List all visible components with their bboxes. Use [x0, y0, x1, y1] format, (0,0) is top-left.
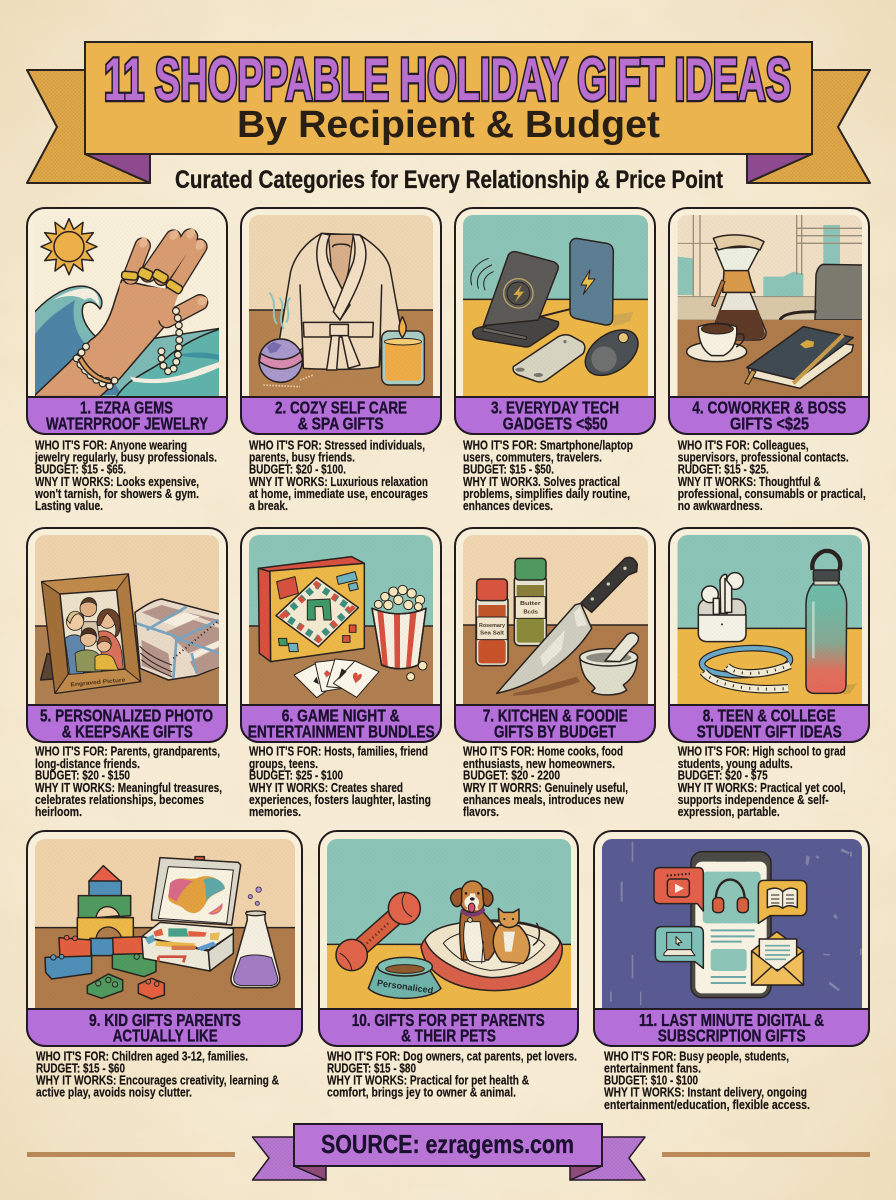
heading band: SUBSCRIPTION GIFTS — [658, 1026, 806, 1046]
heading band — [455, 397, 655, 434]
illustration: blocks, art kit and science flask — [33, 837, 297, 1011]
heading band: 2. COZY SELF CARE — [275, 397, 407, 417]
banner face — [85, 42, 812, 154]
text block: WHO IT'S FOR: Dog owners, cat parents, pet lovers. — [327, 1049, 577, 1063]
text block — [249, 438, 428, 513]
heading band: 3. EVERYDAY TECH — [491, 397, 619, 417]
text block: WHY IT WORKS: Creates shared — [249, 781, 403, 795]
heading band: WATERPROOF JEWELRY — [46, 413, 208, 433]
text block: WHO IT'S FOR: Hosts, families, friend — [249, 745, 428, 759]
text block: entertainment fans. — [604, 1061, 701, 1075]
heading band — [27, 397, 227, 434]
text block: WHY IT WORKS: Instant delivery, ongoing — [604, 1086, 807, 1100]
source ribbon — [252, 1124, 645, 1180]
text block: WHO IT'S FOR: Smartphone/laptop — [463, 438, 633, 452]
text block: active play, avoids noisy clutter. — [36, 1086, 192, 1100]
text block: no awkwardness. — [678, 499, 763, 513]
text block: WHY IT WORKS: Meaningful treasures, — [35, 781, 222, 795]
text block: users, commuters, travelers. — [463, 450, 602, 464]
heading band: 9. KID GIFTS PARENTS — [89, 1010, 241, 1030]
text block — [463, 745, 628, 819]
text block: parents, busy friends. — [249, 450, 355, 464]
text block: expression, partable. — [678, 805, 780, 819]
text block — [678, 438, 866, 513]
text block: WHO IT'S FOR: Home cooks, food — [463, 745, 623, 759]
heading band: 7. KITCHEN & FOODIE — [483, 706, 628, 726]
text block — [327, 1049, 577, 1100]
heading band — [669, 705, 869, 742]
text block — [678, 745, 846, 819]
text block: groups, teens. — [249, 757, 318, 771]
text block: supports independence & self- — [678, 793, 829, 807]
heading band: 11. LAST MINUTE DIGITAL & — [639, 1010, 824, 1030]
illustration: spice jars, chef knife and mortar: Butter — [520, 601, 542, 607]
panel: 3 Everyday tech gadgets — [455, 208, 655, 513]
text block: WNY IT WORKS: Luxurious relaxation — [249, 475, 428, 489]
heading band: GIFTS <$25 — [730, 413, 809, 433]
text block — [249, 745, 431, 819]
panel: 2 Cozy self care and spa gifts — [241, 208, 441, 513]
text block: WHO IT'S FOR: Children aged 3-12, families. — [36, 1049, 248, 1063]
heading band: GADGETS <$50 — [503, 413, 608, 433]
source text: SOURCE: ezragems.com — [321, 1129, 574, 1159]
text block: flavors. — [463, 805, 499, 819]
panel: 5 Personalized photo and keepsake gifts — [27, 528, 227, 819]
text block: BUDGET: $15 - $50. — [463, 462, 554, 476]
heading band: & SPA GIFTS — [298, 413, 384, 433]
title banner — [27, 42, 870, 183]
heading band — [241, 397, 441, 434]
text block: WNY IT WORKS: Looks expensive, — [35, 475, 199, 489]
text block — [463, 438, 633, 513]
illustration: chew toy, personalized bowl, dog and cat on a bed: Personaliced — [376, 978, 434, 996]
text block: experiences, fosters laughter, lasting — [249, 793, 431, 807]
footer rule left — [27, 1152, 235, 1157]
illustration: robe, bath bomb and candle — [247, 213, 437, 398]
text block: long-distance friends. — [35, 757, 140, 771]
text block: memories. — [249, 805, 301, 819]
panel: 7 Kitchen and foodie gifts by budget — [455, 528, 655, 819]
panel: 1 Ezra Gems waterproof jewelry — [27, 208, 227, 513]
heading band — [319, 1009, 578, 1046]
heading band: STUDENT GIFT IDEAS — [697, 722, 842, 742]
heading band: & KEEPSAKE GIFTS — [62, 722, 193, 742]
illustration: family photo frame and plaid blanket: Engraved Picture — [70, 678, 126, 688]
panel: 6 Game night and entertainment bundles — [241, 528, 441, 819]
heading band: 6. GAME NIGHT & — [282, 706, 400, 726]
illustration: spice jars, chef knife and mortar: Rosemary — [479, 623, 505, 629]
text block: comfort, brings jey to owner & animal. — [327, 1086, 516, 1100]
text block: enhances meals, introduces new — [463, 793, 624, 807]
text block: entertainment/education, flexible access. — [604, 1098, 810, 1112]
heading band: 10. GIFTS FOR PET PARENTS — [352, 1010, 545, 1030]
heading band: ENTERTAINMENT BUNDLES — [248, 722, 435, 742]
text block: BUDGET: $10 - $100 — [604, 1074, 698, 1088]
heading band: 8. TEEN & COLLEGE — [703, 706, 836, 726]
illustration: hand with rings, sun and wave — [33, 212, 223, 398]
illustration: board game, playing cards and popcorn — [247, 533, 437, 706]
text block: supervisors, professional contacts. — [678, 450, 849, 464]
text block: WHY IT WORKS: Encourages creativity, learning & — [36, 1074, 279, 1088]
text block: RUDGET: $15 - $80 — [327, 1061, 416, 1075]
heading band: 4. COWORKER & BOSS — [692, 397, 846, 417]
right ribbon tail — [747, 70, 870, 183]
text block — [604, 1049, 810, 1112]
text block — [36, 1049, 279, 1100]
heading band: 1. EZRA GEMS — [80, 397, 173, 417]
text block: WHY IT WORKS: Practical yet cool, — [678, 781, 846, 795]
panel: 10 Gifts for pet parents and their pets — [319, 831, 578, 1100]
panel: 11 Last minute digital and subscription gifts — [594, 831, 869, 1112]
heading band — [594, 1009, 869, 1046]
text block: BUDGET: $20 - $75 — [678, 769, 768, 783]
text block: WHO IT'S FOR: High school to grad — [678, 745, 846, 759]
heading band: & THEIR PETS — [401, 1026, 496, 1046]
illustration: pour-over coffee, cup and notebook — [677, 213, 865, 400]
text block: jewelry regularly, busy professionals. — [34, 450, 217, 464]
illustration: chew toy, personalized bowl, dog and cat on a bed — [325, 837, 573, 1011]
illustration: earbuds, measuring tape and water bottle — [677, 533, 865, 707]
text block — [34, 438, 217, 513]
text block: RUDGET: $15 - $60 — [36, 1061, 125, 1075]
text block: Lasting value. — [35, 499, 103, 513]
heading band: ACTUALLY LIKE — [113, 1026, 218, 1046]
text block: a break. — [249, 499, 288, 513]
text block: enthusiasts, new homeowners. — [463, 757, 615, 771]
text block: WHO IT'S FOR: Busy people, students, — [604, 1049, 789, 1063]
ribbon face — [294, 1124, 602, 1166]
panel: 4 Coworker and boss gifts — [669, 208, 869, 513]
text block: WNY IT WORKS: Thoughtful & — [678, 475, 821, 489]
text block: BUDGET: $15 - $65. — [35, 462, 126, 476]
text block: WHO IT'S FOR: Stressed individuals, — [249, 438, 425, 452]
illustration: wireless charger, power banks and tracker — [462, 213, 650, 399]
heading band — [27, 705, 227, 742]
text block: at home, immediate use, encourages — [249, 487, 428, 501]
text block: won't tarnish, for showers & gym. — [34, 487, 199, 501]
text block: WRY IT WORRS: Genuinely useful, — [463, 781, 628, 795]
text block: BUDGET: $20 - 2200 — [463, 769, 560, 783]
heading band: GIFTS BY BUDGET — [494, 722, 616, 742]
illustration: family photo frame and plaid blanket — [33, 533, 222, 706]
text block: problems, simplifies daily routine, — [463, 487, 630, 501]
heading band — [241, 705, 441, 742]
illustration: spice jars, chef knife and mortar: Sea Salt — [480, 631, 504, 637]
subtitle line in banner: By Recipient & Budget — [237, 104, 660, 146]
text block: WHY IT WORKS: Practical for pet health & — [327, 1074, 529, 1088]
tagline: Curated Categories for Every Relationship & Price Point — [175, 166, 724, 194]
heading band — [455, 705, 655, 742]
heading band — [669, 397, 869, 434]
text block: WHO IT'S FOR: Parents, grandparents, — [35, 745, 220, 759]
panel: 8 Teen and college student gift ideas — [669, 528, 869, 819]
ribbon tails — [252, 1137, 645, 1180]
heading band — [27, 1009, 302, 1046]
left ribbon tail — [27, 70, 150, 183]
text block: BUDGET: $25 - $100 — [249, 769, 343, 783]
text block: students, young adults. — [678, 757, 793, 771]
text block: celebrates relationships, becomes — [35, 793, 204, 807]
text block: WHY IT WORK3. Solves practical — [463, 475, 620, 489]
illustration: phone with digital subscription icons — [600, 837, 863, 1010]
text block: WHO IT'S FOR: Anyone wearing — [35, 438, 187, 452]
illustration: spice jars, chef knife and mortar: Bcds — [523, 609, 538, 615]
text block: heirloom. — [35, 805, 82, 819]
text block: RUDGET: $15 - $25. — [678, 462, 769, 476]
heading band: 5. PERSONALIZED PHOTO — [40, 706, 213, 726]
panel: 9 Kid gifts parents actually like — [27, 831, 302, 1100]
text block — [35, 745, 222, 819]
text block: BUDGET: $20 - $150 — [35, 769, 130, 783]
text block: BUDGET: $20 - $100. — [249, 462, 346, 476]
text block: enhances devices. — [463, 499, 553, 513]
text block: WHO IT'S FOR: Colleagues, — [678, 438, 809, 452]
illustration: spice jars, chef knife and mortar — [462, 533, 650, 707]
footer rule right — [662, 1152, 870, 1157]
